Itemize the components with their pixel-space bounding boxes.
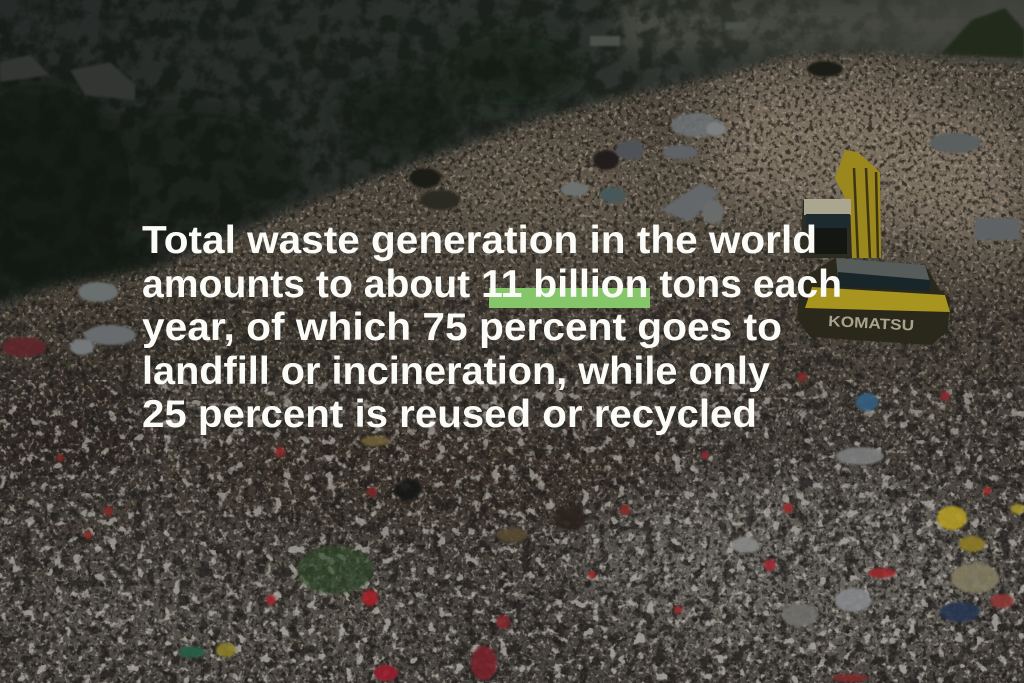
headline line 1: Total waste generation in the world	[142, 219, 817, 262]
headline line 4: landfill or incineration, while only	[142, 350, 770, 393]
excavator boom arm	[835, 150, 881, 258]
plastic bags on the slope	[70, 61, 1020, 355]
headline line 2: amounts to about 11 billion tons each	[142, 263, 842, 306]
misty sky and distant haze	[0, 0, 1024, 340]
excavator cab	[800, 199, 852, 258]
excavator body with KOMATSU lettering: KOMATSU	[828, 313, 915, 334]
headline statement	[142, 219, 842, 436]
excavator	[797, 150, 950, 345]
headline line 5: 25 percent is reused or recycled	[142, 393, 757, 436]
highlight bar behind key figure	[489, 288, 650, 308]
distant buildings	[0, 8, 1024, 100]
headline line 3: year, of which 75 percent goes to	[142, 306, 782, 349]
colored trash spots	[2, 337, 1024, 682]
dark forest on upper left	[0, 0, 900, 302]
excavator body with KOMATSU lettering	[797, 258, 950, 345]
